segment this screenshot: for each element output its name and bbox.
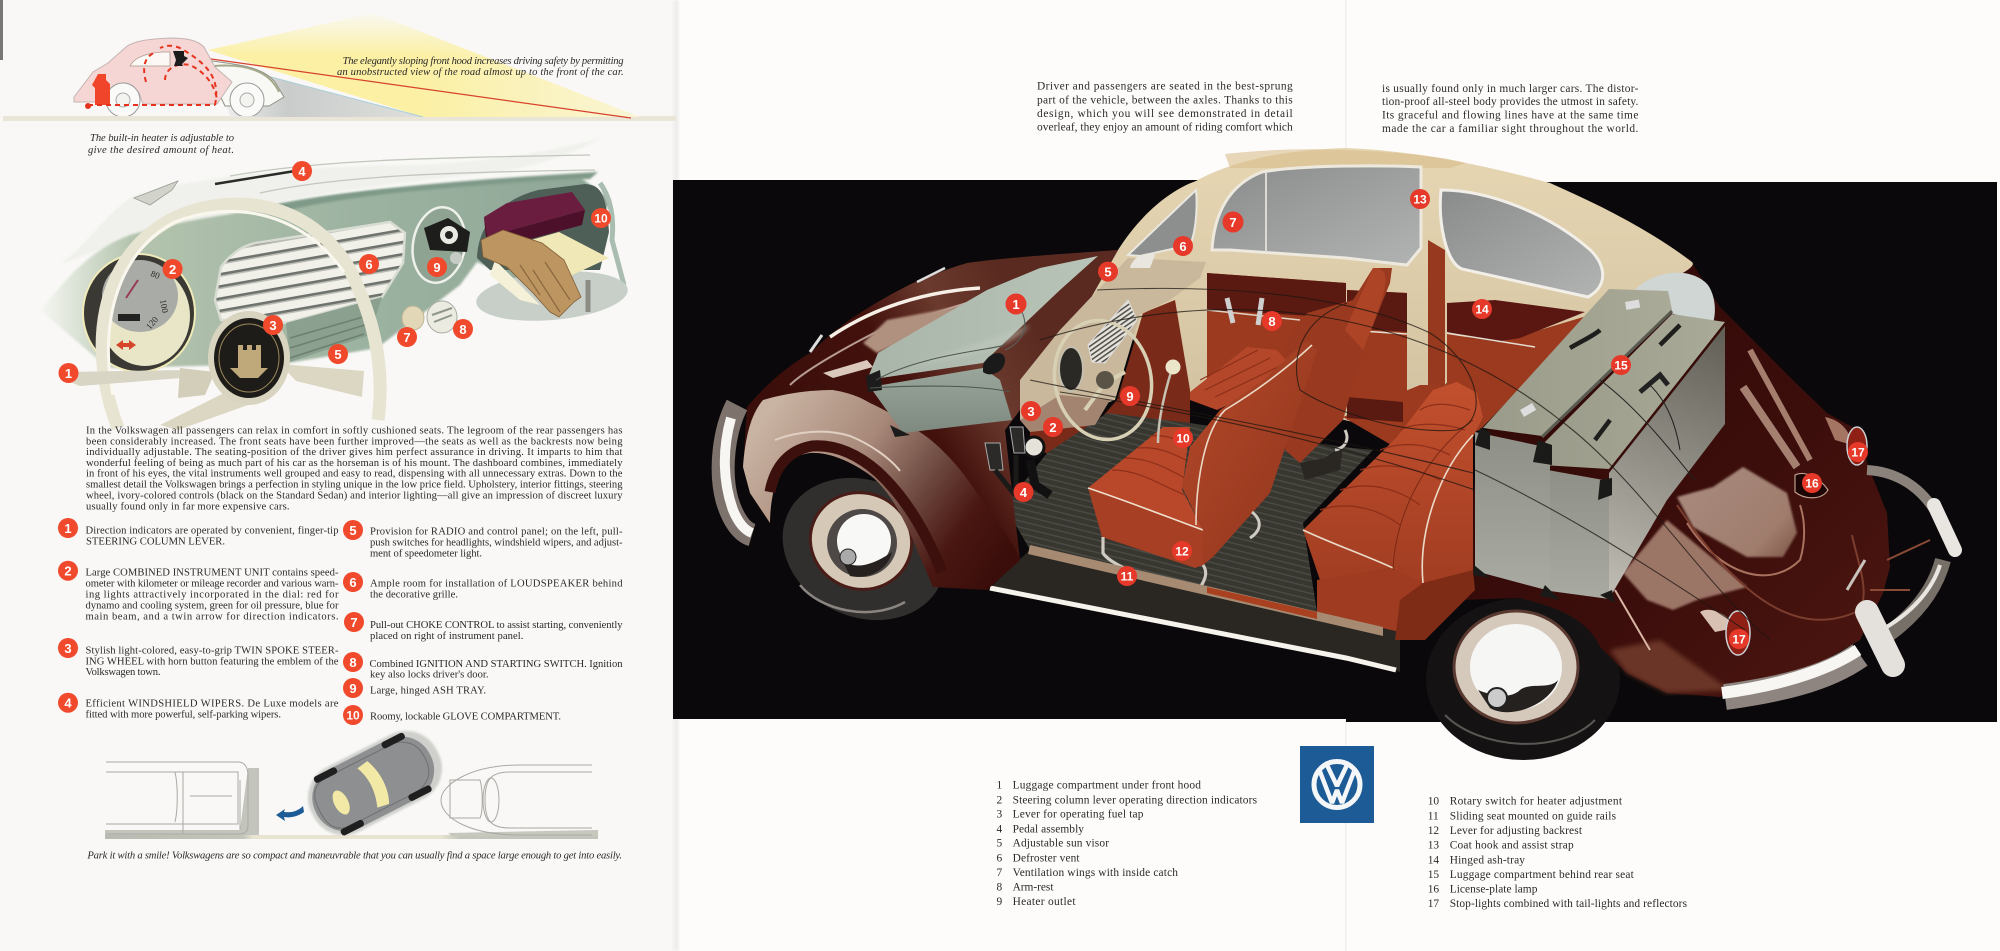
- paper: right page: [673, 0, 2000, 951]
- dash panel: [40, 178, 611, 368]
- item 8: 8: [349, 655, 357, 670]
- text: upper right paragraph column 2: tion-proof all-steel body provides the utmost in safety.: [1382, 96, 1639, 108]
- front body and hood: [743, 250, 1118, 587]
- legend: parts 1 to 9: Arm-rest: [1013, 881, 1054, 893]
- rear highlights: [1610, 350, 1867, 693]
- legend: parts 10 to 17: 11: [1428, 810, 1439, 822]
- legend: parts 1 to 9: Pedal assembly: [1013, 823, 1084, 835]
- text: main paragraph: usually found only in far more expensive cars.: [86, 501, 290, 512]
- legend: parts 10 to 17: Rotary switch for heater adjustment: [1450, 796, 1623, 808]
- item 5: [343, 520, 623, 560]
- front door panel: [1207, 273, 1346, 400]
- badge 10: [1173, 428, 1193, 448]
- badge 4: [292, 161, 312, 181]
- badge 1: [58, 363, 78, 383]
- text: parking caption: Park it with a smile! Volkswagens are so compact and maneuvrable that you can usually find a space large enough to get into easily.: [86, 851, 622, 862]
- legend: parts 1 to 9: 4: [996, 823, 1002, 835]
- legend: parts 1 to 9: Defroster vent: [1013, 852, 1080, 864]
- legend: parts 10 to 17: 14: [1428, 854, 1439, 866]
- badge 2: [163, 259, 183, 279]
- text: front hood caption: The elegantly sloping front hood increases driving safety by permitting: [343, 56, 624, 67]
- text: upper right paragraph column 1: Driver and passengers are seated in the best-sprung: [1037, 81, 1293, 93]
- badge 6: [1173, 236, 1193, 256]
- legend: parts 10 to 17: [1428, 796, 1688, 910]
- windshield trim: [60, 137, 603, 265]
- badge 1: 1: [1012, 297, 1020, 312]
- front fender: [743, 390, 1020, 590]
- car silhouette: [74, 38, 284, 117]
- item 2: dynamo and cooling system, green for oil pressure, blue for: [86, 601, 339, 612]
- choke and ignition: [402, 301, 457, 333]
- badge 9: 9: [1126, 389, 1134, 404]
- item 3: Stylish light-colored, easy-to-grip TWIN SPOKE STEER-: [86, 646, 339, 657]
- item 5: 5: [349, 523, 357, 538]
- item 8: [343, 652, 623, 681]
- badge 17 upper: 17: [1851, 446, 1865, 460]
- instrument unit: 120: [144, 314, 161, 331]
- interior door panels and pillar: [1030, 240, 1590, 453]
- item 6: the decorative grille.: [370, 589, 458, 600]
- badge 7: [1222, 212, 1244, 232]
- logo: VW: [1300, 746, 1374, 823]
- steering wheel: [65, 204, 380, 430]
- item 6: Ample room for installation of LOUDSPEAKER behind: [370, 579, 623, 590]
- text: heater caption: give the desired amount of heat.: [88, 145, 234, 156]
- badge 4: 4: [298, 164, 306, 179]
- badge 11: 11: [1121, 570, 1134, 584]
- item 5: push switches for headlights, windshield wipers, and adjust-: [370, 538, 623, 549]
- illustration: dashboard: [40, 137, 630, 430]
- horn button: [208, 311, 290, 405]
- ash tray: [407, 203, 471, 287]
- legend: parts 1 to 9: Luggage compartment under front hood: [1013, 779, 1201, 791]
- badge 3: [1021, 401, 1041, 421]
- badges: dashboard: [58, 161, 611, 383]
- blue arrow: [276, 806, 304, 821]
- feature list: right column: [343, 520, 623, 725]
- item 10: Roomy, lockable GLOVE COMPARTMENT.: [370, 711, 561, 722]
- badge 4: [1014, 482, 1034, 502]
- item 1: [58, 518, 338, 547]
- item 4: [58, 693, 339, 721]
- badge 3: [263, 315, 283, 335]
- item 2: [58, 561, 339, 622]
- badge 5: [328, 344, 348, 364]
- text: main paragraph: wonderful feeling of being as much part of his car as the horseman is of his mount. The dashboard combines, immediately: [86, 458, 623, 469]
- item 2: main beam, and a twin arrow for direction indicators.: [86, 611, 338, 622]
- badge 12: 12: [1175, 544, 1189, 558]
- legend: parts 1 to 9: [996, 779, 1258, 908]
- text: upper right paragraph column 2: Its graceful and flowing lines have at the same time: [1382, 110, 1638, 122]
- badge 8: [1262, 311, 1282, 331]
- text: upper right paragraph column 1: [1037, 81, 1293, 133]
- legend: parts 1 to 9: Ventilation wings with inside catch: [1013, 867, 1178, 879]
- B pillar: [1428, 240, 1445, 385]
- item 9: [343, 678, 486, 698]
- interior base fill behind rear seat: [1343, 315, 1590, 450]
- item 2: 2: [64, 564, 72, 579]
- legend: parts 10 to 17: 17: [1428, 898, 1439, 910]
- legend: parts 1 to 9: Steering column lever operating direction indicators: [1013, 794, 1258, 806]
- badge 3: 3: [269, 318, 277, 333]
- item 5: ment of speedometer light.: [370, 549, 482, 560]
- rear seat: [1303, 382, 1483, 640]
- text: upper right paragraph column 1: overleaf, they enjoy an amount of riding comfort which: [1037, 121, 1293, 133]
- item 4: Efficient WINDSHIELD WIPERS. De Luxe models are: [86, 699, 339, 710]
- item 2: Large COMBINED INSTRUMENT UNIT contains speed-: [86, 568, 339, 579]
- item 3: [58, 638, 339, 678]
- speaker grille: [215, 222, 405, 323]
- right parked car outline: [441, 765, 592, 835]
- illustration: visibility and heater side view: [3, 13, 676, 121]
- floor mat: [1005, 413, 1373, 612]
- badge 6: 6: [365, 257, 373, 272]
- badge 5: 5: [334, 347, 342, 362]
- legend: parts 1 to 9: 9: [996, 896, 1002, 908]
- text: upper right paragraph column 1: design, which you will see demonstrated in detail: [1037, 108, 1293, 120]
- rear quarter panel: [1447, 300, 1585, 343]
- badges on car: [1006, 189, 1868, 649]
- legend: parts 1 to 9: 6: [996, 852, 1002, 864]
- legend: parts 1 to 9: 2: [996, 794, 1002, 806]
- item 3: 3: [64, 641, 72, 656]
- badge 6: 6: [1179, 239, 1187, 254]
- instrument unit: 80: [149, 268, 162, 281]
- text: upper right paragraph column 2: made the car a familiar sight throughout the world.: [1382, 123, 1639, 135]
- badge 10: 10: [1176, 432, 1190, 446]
- badge 8: 8: [459, 322, 467, 337]
- legend: parts 1 to 9: 8: [996, 881, 1002, 893]
- badge 8: 8: [1268, 314, 1276, 329]
- badge 8: [453, 319, 473, 339]
- item 10: 10: [346, 708, 360, 722]
- ground line: [105, 835, 598, 839]
- driver silhouette: [173, 51, 188, 66]
- item 6: [343, 572, 623, 600]
- badge 17 lower: [1729, 629, 1749, 649]
- legend: parts 1 to 9: 3: [996, 809, 1002, 821]
- item 4: fitted with more powerful, self-parking wipers.: [86, 710, 281, 721]
- rear tire and wheel: [1426, 598, 1620, 760]
- item 9: 9: [349, 681, 357, 696]
- rear luggage cases: [1473, 289, 1725, 603]
- legend: parts 1 to 9: 5: [996, 838, 1002, 850]
- front bumper: [723, 405, 752, 535]
- legend: parts 1 to 9: 1: [996, 779, 1002, 791]
- text: main paragraph: wheel, ivory-colored controls (black on the Standard Sedan) and interior lighting—all give an impression of discreet luxury: [86, 491, 623, 502]
- item 6: 6: [349, 575, 357, 590]
- sill and running board: [990, 545, 1475, 672]
- text: front hood caption: an unobstructed view of the road almost up to the front of the car.: [337, 67, 624, 78]
- red sight line: [204, 58, 631, 118]
- item 10: [343, 705, 561, 725]
- item 7: 7: [350, 615, 358, 630]
- legend: parts 1 to 9: 7: [996, 867, 1002, 879]
- badge 5: 5: [1104, 265, 1112, 280]
- text: upper right paragraph column 2: is usually found only in much larger cars. The distor-: [1382, 83, 1639, 95]
- badge 15: 15: [1614, 358, 1628, 372]
- legend: parts 10 to 17: 15: [1428, 869, 1439, 881]
- text: heater caption: The built-in heater is adjustable to: [90, 133, 234, 144]
- front tire and wheel: [759, 452, 969, 646]
- badge 7: [397, 327, 417, 347]
- kick panel: [1030, 300, 1190, 453]
- legend: parts 10 to 17: Stop-lights combined with tail-lights and reflectors: [1450, 898, 1688, 910]
- ground band: [3, 116, 676, 121]
- badge 7: 7: [1229, 215, 1237, 230]
- item 8: key also locks driver's door.: [370, 670, 488, 681]
- badge 4: 4: [1020, 485, 1028, 500]
- badge 1: [1006, 294, 1026, 314]
- legend: parts 1 to 9: Heater outlet: [1013, 896, 1076, 908]
- rear body: [1460, 258, 1890, 697]
- legend: parts 10 to 17: Luggage compartment behind rear seat: [1450, 869, 1635, 881]
- badge 14: [1472, 299, 1492, 319]
- text: main paragraph: [86, 425, 623, 512]
- item 1: STEERING COLUMN LEVER.: [86, 536, 225, 547]
- item 1: Direction indicators are operated by convenient, finger-tip: [86, 525, 338, 536]
- rear bumper: [1722, 470, 1955, 697]
- badge 12: [1172, 541, 1192, 561]
- text: front hood caption: [337, 56, 624, 78]
- item 2: ing lights attractively incorporated in the dial: red for: [86, 590, 339, 601]
- text: main paragraph: in front of his eyes, the vital instruments well grouped and easy to read, dispensing with all unnecessary extras. Down to the: [86, 469, 623, 480]
- item 5: Provision for RADIO and control panel; on the left, pull-: [370, 527, 623, 538]
- front luggage case: [866, 256, 1098, 437]
- center car top view: [296, 719, 454, 847]
- badge 1: 1: [65, 366, 72, 381]
- legend: parts 10 to 17: Sliding seat mounted on guide rails: [1450, 810, 1617, 822]
- badge 16: [1802, 473, 1822, 493]
- text: heater caption: [88, 133, 234, 156]
- item 9: Large, hinged ASH TRAY.: [370, 686, 486, 697]
- badge 7: 7: [403, 330, 411, 345]
- glove compartment: [474, 183, 630, 327]
- hood highlights: [790, 268, 980, 385]
- badge 2: 2: [169, 262, 176, 277]
- item 1: 1: [64, 521, 72, 536]
- legend: parts 10 to 17: 13: [1428, 840, 1439, 852]
- windows: [1128, 166, 1715, 325]
- passenger front seat: [1190, 268, 1392, 480]
- badge 17 upper: [1848, 442, 1868, 462]
- badge 10: [591, 208, 611, 228]
- legend: parts 10 to 17: 12: [1428, 825, 1439, 837]
- illustration: cutaway car: [723, 148, 1955, 760]
- driver seat: [1088, 340, 1347, 590]
- legend: parts 1 to 9: Adjustable sun visor: [1013, 838, 1109, 850]
- text: main paragraph: In the Volkswagen all passengers can relax in comfort in softly cushioned seats. The legroom of the rear passengers has: [86, 425, 622, 436]
- feature list: left column: [58, 518, 339, 721]
- text: main paragraph: smallest detail the Volkswagen brings a perfection in styling unique in the low price field. Upholstery, interior fittings, steering: [86, 480, 623, 491]
- panel: black background: [673, 180, 1997, 722]
- cream roof and pillars: [1050, 148, 1693, 430]
- badge 3: 3: [1027, 404, 1035, 419]
- badge 15: [1611, 355, 1631, 375]
- item 7: [344, 612, 623, 642]
- legend: parts 10 to 17: License-plate lamp: [1450, 883, 1538, 895]
- instrument unit: [83, 254, 195, 372]
- text: upper right paragraph column 2: [1382, 83, 1639, 135]
- outline ghost lines: [1030, 288, 1770, 640]
- item 3: Volkswagen town.: [86, 667, 160, 678]
- badge 17 lower: 17: [1732, 632, 1746, 646]
- item 2: ometer with kilometer or mileage recorder and various warn-: [86, 579, 339, 590]
- badge 6: [359, 254, 379, 274]
- badge 13: 13: [1413, 192, 1427, 206]
- badge 9: [427, 257, 447, 277]
- badge 9: 9: [433, 260, 441, 275]
- badge 13: [1410, 189, 1430, 209]
- rear door panel: [1347, 290, 1407, 422]
- legend: parts 10 to 17: Coat hook and assist strap: [1450, 840, 1574, 852]
- item 7: placed on right of instrument panel.: [370, 631, 523, 642]
- dash and steering inside car: [985, 253, 1262, 495]
- illustration: parking: [105, 719, 598, 847]
- text: main paragraph: individually adjustable. The seating-position of the driver gives him perfect assurance in driving. It imparts to him that: [86, 447, 623, 458]
- item 7: Pull-out CHOKE CONTROL to assist starting, conveniently: [370, 620, 623, 631]
- legend: parts 10 to 17: 10: [1428, 796, 1439, 808]
- legend: parts 10 to 17: Lever for adjusting backrest: [1450, 825, 1583, 837]
- badge 9: [1120, 386, 1140, 406]
- badge 11: [1117, 566, 1137, 586]
- badge 5: [1098, 262, 1118, 282]
- legend: parts 1 to 9: Lever for operating fuel tap: [1013, 809, 1144, 821]
- badge 2: [1043, 417, 1063, 437]
- item 3: ING WHEEL with horn button featuring the emblem of the: [86, 656, 339, 667]
- text: main paragraph: been considerably increased. The front seats have been further improved—the seats as well as the backrests now being: [86, 436, 623, 447]
- instrument unit: 100: [158, 299, 170, 314]
- badge 16: 16: [1805, 476, 1819, 490]
- paper: left page: [0, 0, 676, 951]
- badge 2: 2: [1049, 420, 1057, 435]
- text: upper right paragraph column 1: part of the vehicle, between the axles. Thanks to this: [1037, 94, 1293, 106]
- item 4: 4: [64, 696, 72, 711]
- item 8: Combined IGNITION AND STARTING SWITCH. Ignition: [370, 659, 623, 670]
- left parked car outline: [106, 762, 248, 834]
- legend: parts 10 to 17: Hinged ash-tray: [1450, 854, 1525, 866]
- legend: parts 10 to 17: 16: [1428, 883, 1439, 895]
- badge 10: 10: [594, 212, 608, 226]
- badge 14: 14: [1475, 302, 1489, 316]
